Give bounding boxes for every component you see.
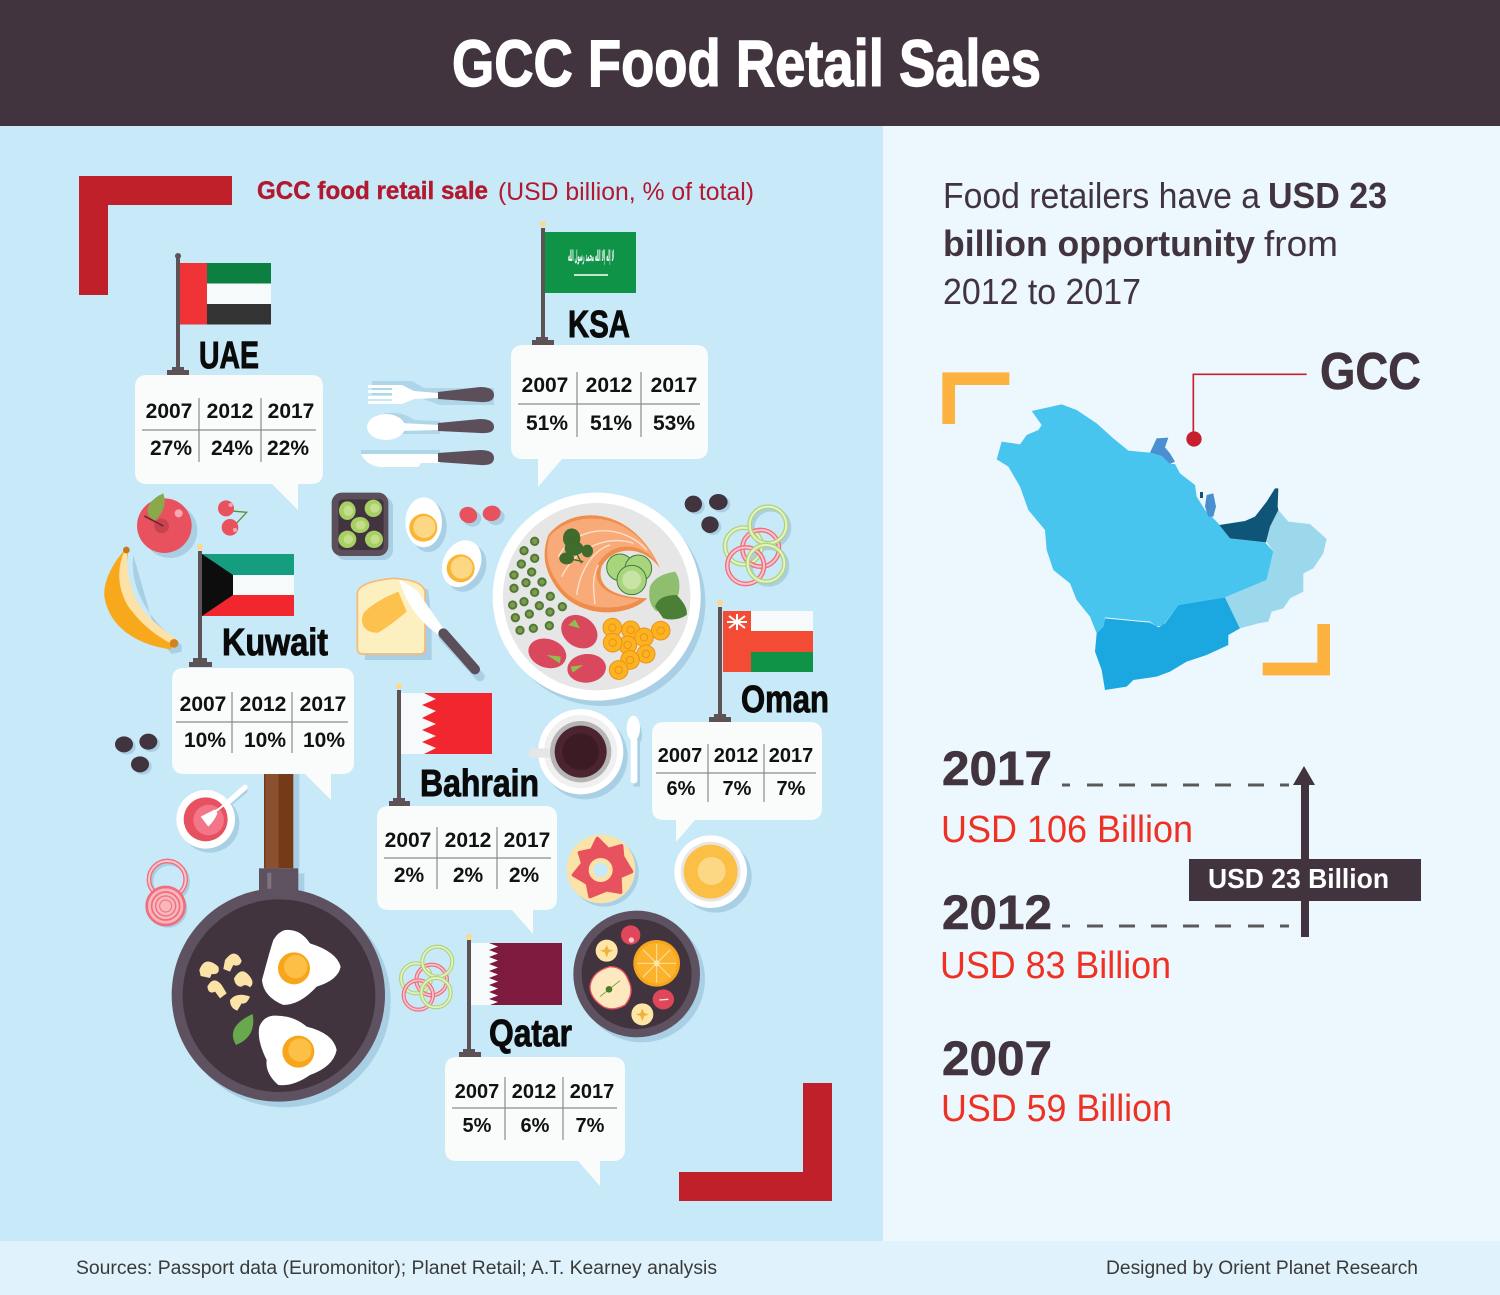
callout: KSA shares: 51%	[526, 412, 568, 435]
country: Bahrain	[377, 683, 557, 934]
Yemen	[1095, 597, 1240, 690]
callout: KSA shares: 2007	[522, 374, 568, 397]
chart heading: (USD billion, % of total)	[498, 178, 754, 206]
icon: olives	[115, 734, 160, 775]
callout: UAE shares: 2007	[146, 400, 192, 423]
icon: frosted donut	[567, 835, 639, 907]
country: Kuwait	[172, 544, 354, 800]
icon: fruit plate	[573, 911, 705, 1042]
callout: Qatar shares	[445, 1057, 625, 1186]
country: KSA	[511, 221, 708, 487]
lettuce	[649, 572, 687, 619]
Qatar	[1205, 493, 1216, 517]
callout: Kuwait shares: 10%	[244, 729, 286, 752]
country name: Oman	[741, 679, 829, 721]
icon: Saudi flag	[532, 221, 636, 345]
callout: Oman shares: 2012	[714, 745, 758, 767]
callout: Bahrain shares: 2%	[453, 864, 483, 887]
panel: footer	[0, 1241, 1500, 1295]
peas	[509, 538, 566, 634]
timeline: years and values: 2007	[942, 1033, 1052, 1086]
callout: Qatar shares: 2012	[512, 1081, 556, 1103]
country name: KSA	[568, 304, 630, 346]
icon: Kuwait flag	[189, 544, 294, 667]
icon: UAE flag	[167, 253, 271, 375]
icon: banana	[104, 547, 182, 654]
callout: KSA shares	[511, 345, 708, 487]
country name: Qatar	[489, 1013, 572, 1055]
icon: cutlery	[361, 381, 494, 467]
basil leaf	[233, 1014, 253, 1045]
timeline: years and values: USD 106 Billion	[941, 809, 1193, 851]
callout: Oman shares: 7%	[777, 778, 806, 800]
icon: cherries	[218, 500, 247, 536]
callout: KSA shares: 53%	[653, 412, 695, 435]
group: frying pan and bowl	[147, 773, 391, 1107]
timeline: years and values	[940, 743, 1193, 1130]
callout: Bahrain shares: 2%	[394, 864, 424, 887]
text block: opportunity statement: billion opportunity	[943, 223, 1255, 264]
country name: Kuwait	[222, 622, 328, 664]
icon: dinner plate	[493, 493, 705, 706]
icon: tray of sprouts	[332, 493, 393, 560]
text block: opportunity statement: Food retailers have a	[943, 175, 1261, 216]
icon: boiled egg halves	[405, 497, 494, 598]
callout: Oman shares	[652, 722, 822, 842]
Bahrain	[1200, 492, 1203, 498]
callout: UAE shares: 22%	[267, 437, 309, 460]
UAE	[1219, 488, 1278, 542]
callout: UAE shares: 2017	[268, 400, 314, 423]
panel: right summary	[940, 175, 1421, 1130]
icon: toast with butter knife	[357, 578, 480, 677]
callout: Bahrain shares: 2007	[385, 829, 431, 852]
fried eggs	[259, 930, 341, 1085]
callout: UAE shares: 2012	[207, 400, 253, 423]
icon: coffee cup	[529, 709, 628, 799]
title: GCC Food Retail Sales	[452, 26, 1041, 100]
map bracket bottom right	[1263, 624, 1330, 675]
callout: Kuwait shares: 10%	[303, 729, 345, 752]
country name: Bahrain	[420, 763, 539, 805]
callout: Kuwait shares: 2012	[240, 693, 286, 716]
cucumber slices	[607, 554, 652, 595]
icon: bowl of sauce	[176, 787, 245, 853]
Oman	[1225, 510, 1327, 628]
carrot slices	[603, 618, 670, 679]
icon: onion rings	[725, 507, 789, 584]
callout: Kuwait shares	[172, 668, 354, 800]
Kuwait	[1150, 438, 1175, 464]
designer credit: Designed by Orient Planet Research	[1106, 1258, 1418, 1279]
icon: onion rings	[401, 947, 452, 1010]
icon: frying pan	[172, 773, 391, 1107]
callout: Bahrain shares: 2017	[504, 829, 550, 852]
icon: teaspoon	[627, 716, 642, 787]
tomatoes	[525, 608, 607, 684]
timeline: years and values: 2012	[942, 887, 1052, 940]
country: Oman	[652, 600, 829, 842]
callout: Kuwait shares: 2017	[300, 693, 346, 716]
timeline: years and values: 2017	[942, 743, 1052, 796]
callout: UAE shares: 27%	[150, 437, 192, 460]
red corner bracket bottom right	[679, 1083, 832, 1201]
group: food items at left	[104, 493, 505, 775]
icon: apple	[137, 493, 197, 558]
callout: Qatar shares: 6%	[521, 1115, 550, 1137]
country: UAE	[135, 253, 323, 510]
text block: opportunity statement: 2012 to 2017	[943, 271, 1141, 312]
icon: Qatar flag	[459, 934, 562, 1057]
map bracket top left	[942, 372, 1009, 424]
salmon	[545, 515, 660, 612]
callout: Qatar shares: 7%	[576, 1115, 605, 1137]
callout: Bahrain shares: 2012	[445, 829, 491, 852]
callout: KSA shares: 2017	[651, 374, 697, 397]
GCC pointer line	[1193, 374, 1307, 438]
icon: olives	[685, 494, 730, 535]
dashed guides	[1062, 785, 1289, 926]
callout: Oman shares: 2017	[769, 745, 813, 767]
callout: Kuwait shares: 2007	[180, 693, 226, 716]
sources text: Sources: Passport data (Euromonitor); Planet Retail; A.T. Kearney analysis	[76, 1258, 717, 1279]
timeline: years and values: USD 59 Billion	[941, 1088, 1172, 1130]
country: KSA: لا إله إلا الله محمد رسول الله	[568, 247, 614, 265]
callout: Qatar shares: 2007	[455, 1081, 499, 1103]
icon: small tomatoes	[457, 504, 505, 527]
icon: bowl of juice	[674, 835, 752, 913]
callout: Oman shares: 7%	[723, 778, 752, 800]
icon: Bahrain flag	[389, 683, 492, 806]
chart heading	[257, 177, 754, 206]
group: plate and items at right	[493, 493, 789, 706]
mushrooms	[199, 953, 252, 1011]
callout: USD 23 Billion: USD 23 Billion	[1208, 863, 1389, 894]
callout: UAE shares: 24%	[211, 437, 253, 460]
icon: Oman flag	[709, 600, 813, 722]
panel: left food panel	[0, 126, 883, 1241]
map label: GCC	[1320, 343, 1421, 401]
chart heading: GCC food retail sale	[257, 177, 488, 205]
callout: Bahrain shares	[377, 806, 557, 934]
Saudi Arabia	[997, 404, 1273, 633]
callout: UAE shares	[135, 375, 323, 510]
text block: opportunity statement	[943, 175, 1387, 312]
callout: KSA shares: 51%	[590, 412, 632, 435]
callout: Qatar shares: 5%	[463, 1115, 492, 1137]
callout: Qatar shares: 2017	[570, 1081, 614, 1103]
callout: Oman shares: 6%	[667, 778, 696, 800]
text block: opportunity statement: from	[1264, 223, 1338, 264]
callout: USD 23 Billion	[1189, 859, 1421, 901]
timeline: years and values: USD 83 Billion	[940, 945, 1171, 987]
callout: Bahrain shares: 2%	[509, 864, 539, 887]
callout: Oman shares: 2007	[658, 745, 702, 767]
country: Qatar	[445, 934, 625, 1186]
callout: KSA shares: 2012	[586, 374, 632, 397]
country name: UAE	[199, 335, 259, 377]
text block: opportunity statement: USD 23	[1268, 175, 1387, 216]
map: GCC region	[942, 372, 1330, 690]
GCC pointer dot	[1186, 431, 1202, 447]
icon: onion slices	[147, 861, 188, 928]
parsley	[559, 528, 593, 564]
red corner bracket top left	[79, 176, 232, 295]
panel: title banner	[0, 0, 1500, 126]
arrow: growth	[1293, 766, 1315, 937]
callout: Kuwait shares: 10%	[184, 729, 226, 752]
group: coffee, dessert and fruit plate	[401, 709, 752, 1042]
